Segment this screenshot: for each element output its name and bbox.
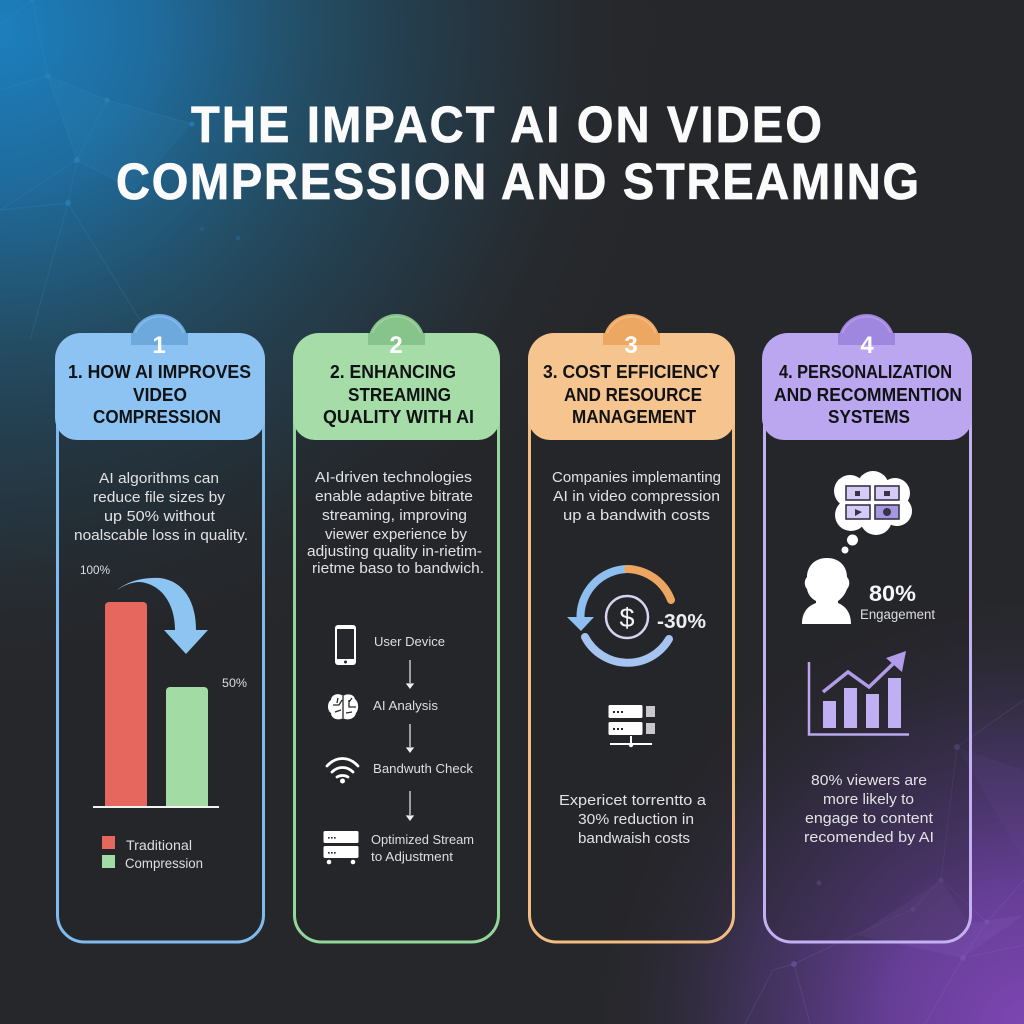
- panel 1 header: [55, 332, 265, 440]
- panel 3 description: AI in video compression: [553, 489, 720, 505]
- panel 3 header: MANAGEMENT: [572, 407, 696, 427]
- arrow: reduction: [116, 578, 208, 654]
- arrow: [407, 660, 413, 688]
- panel 1 header: COMPRESSION: [93, 407, 221, 427]
- panel 4 result text: engage to content: [805, 811, 933, 827]
- panel 2 header: 2. ENHANCING: [330, 362, 456, 382]
- icon: server network: [608, 705, 655, 747]
- title: [116, 97, 919, 210]
- cost reduction ring: $: [619, 603, 635, 633]
- panel 3 header: 3: [624, 332, 638, 359]
- bar chart: [80, 563, 247, 808]
- panel: 1 how AI improves video compression: [55, 314, 265, 942]
- panel 2 description: enable adaptive bitrate: [315, 489, 473, 505]
- title: COMPRESSION AND STREAMING: [116, 154, 919, 210]
- bar chart: 100%: [80, 563, 110, 577]
- panel 4 header: [762, 332, 972, 440]
- panel 3 result text: [559, 793, 707, 847]
- icon: wifi: [327, 758, 358, 784]
- panel 3 result text: bandwaish costs: [578, 831, 690, 847]
- bar chart: 50%: [222, 676, 247, 690]
- panel: 3 cost efficiency: [528, 314, 735, 942]
- icon: brain: [328, 694, 358, 719]
- panel 4 result text: 80% viewers are: [811, 773, 927, 789]
- panel 4 header: 4. PERSONALIZATION: [779, 362, 952, 382]
- icon: thought cloud: [834, 471, 912, 554]
- panel 2 header: 2: [389, 332, 403, 359]
- panel: 4 personalization: [762, 314, 972, 942]
- icon: phone: [335, 625, 356, 665]
- panel 1 header: 1: [152, 332, 166, 359]
- panel 1 description: reduce file sizes by: [93, 490, 226, 506]
- panel 4 result text: [804, 773, 934, 846]
- panel 2 number tab: [368, 314, 425, 345]
- panel 2 description: viewer experience by: [325, 527, 468, 543]
- legend: Traditional: [126, 838, 192, 853]
- panel 2 header: [293, 332, 500, 440]
- panel 3 result text: 30% reduction in: [578, 812, 694, 828]
- icon: server: [324, 831, 358, 864]
- arrow: [407, 724, 413, 752]
- title: THE IMPACT AI ON VIDEO: [191, 97, 822, 153]
- panel 4 header: AND RECOMMENTION: [774, 385, 962, 405]
- flow diagram: AI Analysis: [373, 699, 438, 713]
- engagement stat: Engagement: [860, 607, 935, 622]
- panel 1 description: up 50% without: [104, 509, 215, 525]
- panel 3 result text: Expericet torrentto a: [559, 793, 707, 809]
- legend: Compression: [125, 856, 203, 871]
- panel 3 number tab: [603, 314, 660, 345]
- panel 4 header: 4: [860, 332, 874, 359]
- panel 4 result text: recomended by AI: [804, 830, 934, 846]
- panel 2 description: [307, 470, 484, 577]
- panel 2 header: QUALITY WITH AI: [323, 407, 474, 427]
- panel 1 description: AI algorithms can: [99, 471, 219, 487]
- panel 1 description: [74, 471, 248, 544]
- line and bar chart: [809, 651, 909, 734]
- engagement stat: [860, 581, 935, 622]
- flow diagram: Bandwuth Check: [373, 762, 474, 776]
- panel 2 description: rietme baso to bandwich.: [312, 561, 484, 577]
- panel 2 header: STREAMING: [348, 385, 451, 405]
- panel 4 header: SYSTEMS: [828, 407, 910, 427]
- flow diagram: to Adjustment: [371, 850, 454, 864]
- cost reduction ring: [567, 569, 706, 663]
- panel 2 description: adjusting quality in-rietim-: [307, 544, 482, 560]
- panel 3 header: 3. COST EFFICIENCY: [543, 362, 720, 382]
- panel 1 number tab: [131, 314, 188, 345]
- engagement stat: 80%: [869, 581, 916, 606]
- cost reduction ring: -30%: [657, 611, 706, 633]
- flow diagram: [324, 625, 474, 864]
- panel 2 description: AI-driven technologies: [315, 470, 472, 486]
- panel 2 description: streaming, improving: [322, 508, 467, 524]
- panel 1 header: 1. HOW AI IMPROVES: [68, 362, 251, 382]
- flow diagram: Optimized Stream: [371, 833, 474, 847]
- panel 4 number tab: [838, 314, 895, 345]
- panel 3 header: [528, 332, 735, 440]
- panel 3 description: Companies implemanting: [552, 470, 721, 486]
- panel 3 description: up a bandwith costs: [563, 508, 710, 524]
- panel 4 result text: more likely to: [823, 792, 914, 808]
- legend: [102, 836, 203, 871]
- flow diagram: User Device: [374, 635, 445, 649]
- panel 3 description: [552, 470, 721, 524]
- panel 3 header: AND RESOURCE: [564, 385, 702, 405]
- panel 1 description: noalscable loss in quality.: [74, 528, 248, 544]
- icon: person: [802, 558, 851, 624]
- panel 1 header: VIDEO: [133, 385, 187, 405]
- arrow: [407, 791, 413, 820]
- panel: 2 enhancing streaming quality: [293, 314, 500, 942]
